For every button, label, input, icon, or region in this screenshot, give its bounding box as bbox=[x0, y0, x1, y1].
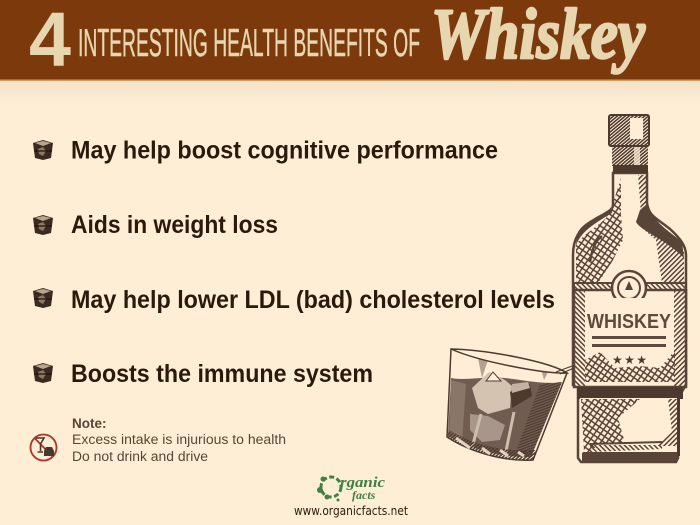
benefit 3: May help lower LDL (bad) cholesterol levels bbox=[71, 286, 555, 314]
bottle hatching bbox=[576, 178, 623, 283]
note text: Note: bbox=[72, 416, 106, 431]
whiskey glass illustration bbox=[447, 349, 574, 460]
note block: Do not drink and drive bbox=[72, 449, 208, 464]
bottle base bbox=[580, 398, 680, 462]
benefit 2: Aids in weight loss bbox=[71, 211, 278, 239]
icon: whiskey glass bbox=[33, 215, 53, 235]
label stars: ★★★ bbox=[612, 353, 647, 367]
label lines bbox=[592, 336, 666, 347]
bottle body bbox=[573, 173, 686, 462]
lower band bbox=[577, 387, 683, 399]
website url: www.organicfacts.net bbox=[294, 504, 408, 518]
bottle cap bbox=[609, 115, 649, 146]
label bbox=[574, 290, 686, 387]
glass body bbox=[447, 349, 567, 460]
icon: whiskey glass bbox=[33, 288, 53, 308]
benefit 4: Boosts the immune system bbox=[71, 360, 373, 388]
whiskey bottle illustration bbox=[573, 115, 686, 462]
label emblem bbox=[610, 271, 648, 307]
icon: whiskey glass bbox=[33, 363, 53, 383]
icon: leaf wreath bbox=[317, 476, 341, 502]
bottle collar bbox=[612, 146, 648, 166]
logo subword: facts bbox=[352, 488, 376, 502]
note block bbox=[30, 416, 286, 464]
benefit 1: May help boost cognitive performance bbox=[71, 136, 498, 164]
benefits list bbox=[33, 136, 555, 388]
icon: no drinking and driving bbox=[30, 434, 56, 460]
glass rim bbox=[451, 349, 567, 373]
organic facts logo bbox=[294, 475, 408, 518]
whiskey liquid bbox=[448, 378, 562, 457]
logo wordmark: rganic bbox=[340, 475, 385, 491]
ice cubes bbox=[470, 372, 532, 442]
icon: whiskey glass bbox=[33, 140, 53, 160]
glass bars bbox=[472, 412, 514, 456]
note block: Excess intake is injurious to health bbox=[72, 432, 286, 447]
label text: WHISKEY bbox=[587, 310, 671, 333]
header banner bbox=[0, 0, 700, 83]
reflections above liquid bbox=[478, 358, 550, 380]
glass base bbox=[447, 430, 537, 460]
